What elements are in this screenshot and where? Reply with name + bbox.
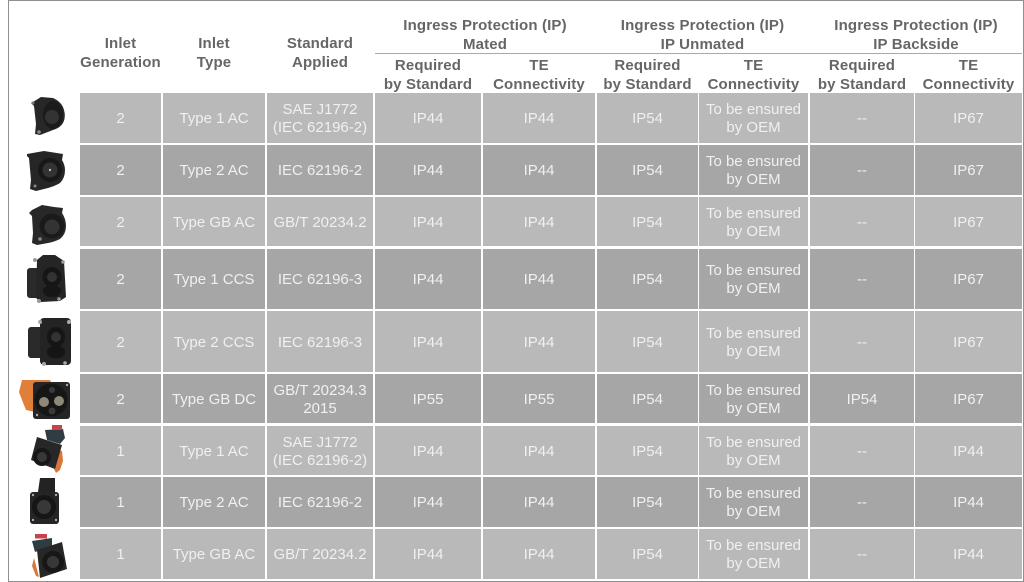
row 2: generation 2 Type 2 AC: IP54 [632, 162, 663, 179]
row 1: generation 2 Type 1 AC: by OEM [726, 119, 781, 136]
row 2: generation 2 Type 2 AC: by OEM [726, 171, 781, 188]
heading: standard applied [287, 35, 353, 70]
row 3: generation 2 Type GB AC: by OEM [726, 222, 781, 240]
row 4: generation 2 Type 1 CCS: IP44 [524, 271, 554, 288]
row 5: generation 2 Type 2 CCS: IP44 [524, 334, 554, 350]
icon: Type 2 AC inlet [27, 151, 65, 191]
row 7: generation 1 Type 1 AC: IP44 [953, 442, 984, 460]
heading: inlet generation: Inlet [105, 35, 136, 52]
row 8: generation 1 Type 2 AC: IEC 62196-2 [278, 494, 362, 511]
row 8: generation 1 Type 2 AC: IP44 [413, 494, 443, 511]
row 1: generation 2 Type 1 AC: SAE J1772 [282, 101, 358, 118]
row 4: generation 2 Type 1 CCS: IP54 [632, 271, 663, 288]
row 4: generation 2 Type 1 CCS [27, 249, 1022, 309]
subheading: unmated required by standard [603, 57, 692, 92]
row 6: generation 2 Type GB DC: by OEM [726, 400, 781, 416]
subheading: backside TE connectivity: Connectivity [923, 76, 1014, 92]
row 1: generation 2 Type 1 AC: 2 [116, 110, 125, 127]
row 3: generation 2 Type GB AC: GB/T 20234.2 [273, 214, 367, 230]
subheading: backside required by standard: Required [829, 57, 895, 74]
row 2: generation 2 Type 2 AC: Type 2 AC [179, 162, 249, 179]
row 8: generation 1 Type 2 AC: Type 2 AC [179, 494, 249, 511]
icon: Type 2 CCS inlet [28, 318, 71, 366]
row 6: generation 2 Type GB DC: 2015 [303, 400, 337, 416]
heading: IP mated [403, 17, 567, 52]
heading: IP unmated [621, 17, 784, 52]
row 9: generation 1 Type GB AC: Type GB AC [173, 546, 255, 563]
row 7: generation 1 Type 1 AC: (IEC 62196-2) [273, 452, 367, 468]
row 8: generation 1 Type 2 AC: IP44 [524, 494, 554, 511]
subheading: backside required by standard: by Standard [818, 76, 906, 92]
subheading: unmated TE connectivity: Connectivity [708, 76, 799, 92]
subheading: mated required by standard: by Standard [384, 76, 472, 92]
row 9: generation 1 Type GB AC: by OEM [726, 555, 781, 572]
subheading: unmated required by standard: by Standard [603, 76, 692, 92]
heading: IP backside [834, 17, 998, 52]
row 9: generation 1 Type GB AC: -- [857, 546, 867, 563]
row 9: generation 1 Type GB AC: IP44 [413, 546, 443, 563]
icon: Type 1 AC inlet with orange connector [31, 425, 65, 473]
heading: standard applied: Standard [287, 35, 353, 52]
row 7: generation 1 Type 1 AC: IP44 [524, 442, 554, 460]
row 8: generation 1 Type 2 AC: IP44 [953, 494, 984, 511]
row 5: generation 2 Type 2 CCS [28, 311, 1022, 372]
row 1: generation 2 Type 1 AC: IP54 [632, 110, 663, 127]
row 4: generation 2 Type 1 CCS: Type 1 CCS [174, 271, 254, 288]
row 7: generation 1 Type 1 AC: To be ensured [706, 434, 801, 450]
row 5: generation 2 Type 2 CCS: 2 [116, 334, 125, 350]
subheading: unmated required by standard: Required [614, 57, 681, 74]
row 2: generation 2 Type 2 AC: 2 [116, 162, 125, 179]
subheading: mated required by standard: Required [395, 57, 461, 74]
heading: IP mated: Ingress Protection (IP) [403, 17, 567, 34]
row 3: generation 2 Type GB AC: Type GB AC [173, 214, 255, 230]
row 9: generation 1 Type GB AC [32, 529, 1022, 579]
row 6: generation 2 Type GB DC: IP67 [953, 390, 984, 408]
row 3: generation 2 Type GB AC: IP67 [953, 214, 984, 230]
row 7: generation 1 Type 1 AC: SAE J1772 [282, 434, 358, 450]
row 1: generation 2 Type 1 AC: IP44 [524, 110, 554, 127]
row 9: generation 1 Type GB AC: GB/T 20234.2 [273, 546, 367, 563]
icon: Type GB AC inlet with orange connector [32, 534, 67, 578]
subheading: unmated TE connectivity [708, 57, 800, 92]
row 2: generation 2 Type 2 AC: IP44 [524, 162, 554, 179]
row 1: generation 2 Type 1 AC: To be ensured [706, 101, 801, 118]
row 3: generation 2 Type GB AC: IP44 [413, 214, 443, 230]
icon: Type 2 AC rear-mount inlet [30, 478, 59, 524]
row 6: generation 2 Type GB DC: Type GB DC [172, 390, 256, 408]
heading: IP backside: IP Backside [873, 36, 959, 52]
row 3: generation 2 Type GB AC: IP54 [632, 214, 663, 230]
heading: inlet generation [80, 35, 161, 70]
row 4: generation 2 Type 1 CCS: To be ensured [706, 262, 801, 279]
row 6: generation 2 Type GB DC: To be ensured [706, 382, 801, 398]
row 4: generation 2 Type 1 CCS: by OEM [726, 280, 781, 297]
row 2: generation 2 Type 2 AC: IP44 [413, 162, 443, 179]
heading: IP mated: Mated [463, 36, 507, 52]
icon: Type GB AC inlet [29, 205, 66, 245]
heading: standard applied: Applied [292, 54, 348, 70]
row 3: generation 2 Type GB AC: 2 [116, 214, 125, 230]
heading: inlet type: Inlet [198, 35, 230, 52]
row 3: generation 2 Type GB AC [29, 197, 1022, 246]
row 1: generation 2 Type 1 AC: IP44 [413, 110, 443, 127]
subheading: mated TE connectivity: Connectivity [493, 76, 585, 92]
row 6: generation 2 Type GB DC: IP55 [524, 390, 554, 408]
row 1: generation 2 Type 1 AC: -- [857, 110, 867, 127]
row 1: generation 2 Type 1 AC: IP67 [953, 110, 984, 127]
row 4: generation 2 Type 1 CCS: -- [857, 271, 867, 288]
row 9: generation 1 Type GB AC: 1 [116, 546, 125, 563]
row 2: generation 2 Type 2 AC [27, 145, 1022, 195]
row 4: generation 2 Type 1 CCS: 2 [116, 271, 125, 288]
heading: IP unmated: Ingress Protection (IP) [621, 17, 784, 34]
row 4: generation 2 Type 1 CCS: IP44 [413, 271, 443, 288]
row 1: generation 2 Type 1 AC: Type 1 AC [179, 110, 249, 127]
row 3: generation 2 Type GB AC: IP44 [524, 214, 554, 230]
subheading: mated required by standard [384, 57, 472, 92]
row 6: generation 2 Type GB DC [19, 374, 1022, 423]
row 3: generation 2 Type GB AC: -- [857, 214, 867, 230]
row 2: generation 2 Type 2 AC: -- [857, 162, 867, 179]
row 7: generation 1 Type 1 AC: Type 1 AC [179, 442, 249, 460]
row 5: generation 2 Type 2 CCS: -- [857, 334, 867, 350]
row 5: generation 2 Type 2 CCS: To be ensured [706, 324, 801, 342]
row 9: generation 1 Type GB AC: IP44 [524, 546, 554, 563]
row 5: generation 2 Type 2 CCS: IEC 62196-3 [278, 334, 362, 350]
row 8: generation 1 Type 2 AC: To be ensured [706, 485, 801, 502]
heading: IP backside: Ingress Protection (IP) [834, 17, 998, 34]
row 7: generation 1 Type 1 AC: IP44 [413, 442, 443, 460]
row 8: generation 1 Type 2 AC: by OEM [726, 503, 781, 520]
heading: inlet generation: Generation [80, 54, 161, 70]
row 1: generation 2 Type 1 AC [31, 93, 1022, 143]
row 4: generation 2 Type 1 CCS: IEC 62196-3 [278, 271, 362, 288]
row 7: generation 1 Type 1 AC: IP54 [632, 442, 663, 460]
row 1: generation 2 Type 1 AC: (IEC 62196-2) [273, 119, 367, 136]
heading: inlet type [196, 35, 231, 70]
row 7: generation 1 Type 1 AC: -- [857, 442, 867, 460]
row 5: generation 2 Type 2 CCS: Type 2 CCS [174, 334, 254, 350]
icon: Type 1 CCS inlet [27, 255, 66, 303]
subheading: backside required by standard [818, 57, 906, 92]
subheading: backside TE connectivity: TE [959, 57, 978, 74]
row 9: generation 1 Type GB AC: IP44 [953, 546, 984, 563]
row 9: generation 1 Type GB AC: To be ensured [706, 537, 801, 554]
icon: Type GB DC inlet [19, 380, 70, 419]
row 6: generation 2 Type GB DC: 2 [116, 390, 125, 408]
icon: Type 1 AC inlet [31, 97, 65, 135]
row 6: generation 2 Type GB DC: IP54 [847, 390, 877, 408]
row 5: generation 2 Type 2 CCS: by OEM [726, 342, 781, 360]
row 7: generation 1 Type 1 AC [31, 425, 1022, 475]
row 3: generation 2 Type GB AC: To be ensured [706, 204, 801, 222]
row 8: generation 1 Type 2 AC: 1 [116, 494, 125, 511]
row 8: generation 1 Type 2 AC: IP54 [632, 494, 663, 511]
subheading: mated TE connectivity [493, 57, 585, 92]
subheading: backside TE connectivity [923, 57, 1014, 92]
subheading: unmated TE connectivity: TE [744, 57, 763, 74]
row 2: generation 2 Type 2 AC: To be ensured [706, 153, 801, 170]
row 9: generation 1 Type GB AC: IP54 [632, 546, 663, 563]
row 7: generation 1 Type 1 AC: by OEM [726, 452, 781, 468]
row 7: generation 1 Type 1 AC: 1 [116, 442, 125, 460]
row 2: generation 2 Type 2 AC: IP67 [953, 162, 984, 179]
row 5: generation 2 Type 2 CCS: IP54 [632, 334, 663, 350]
row 4: generation 2 Type 1 CCS: IP67 [953, 271, 984, 288]
subheading: mated TE connectivity: TE [529, 57, 549, 74]
heading: IP unmated: IP Unmated [661, 36, 744, 52]
row 6: generation 2 Type GB DC: GB/T 20234.3 [273, 382, 367, 398]
row 8: generation 1 Type 2 AC: -- [857, 494, 867, 511]
row 6: generation 2 Type GB DC: IP54 [632, 390, 663, 408]
row 6: generation 2 Type GB DC: IP55 [413, 390, 443, 408]
row 5: generation 2 Type 2 CCS: IP67 [953, 334, 984, 350]
row 8: generation 1 Type 2 AC [30, 477, 1022, 527]
row 2: generation 2 Type 2 AC: IEC 62196-2 [278, 162, 362, 179]
row 5: generation 2 Type 2 CCS: IP44 [413, 334, 443, 350]
heading: inlet type: Type [197, 54, 231, 70]
